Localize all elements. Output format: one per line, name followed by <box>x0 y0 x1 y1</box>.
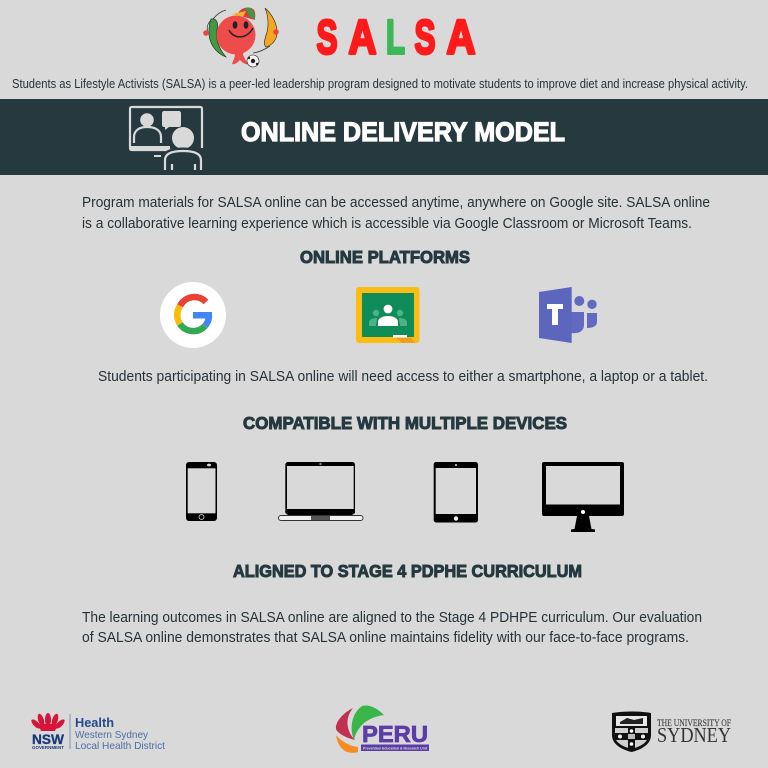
logo wordmark: SALSA: A <box>446 12 476 64</box>
text block: program materials: Program materials for SALSA online can be accessed anytime, anywhere on Google site. SALSA online <box>82 195 710 211</box>
icon: SALSA mascot <box>203 7 279 67</box>
text block: program materials <box>82 195 710 232</box>
icon: online video meeting <box>130 107 202 170</box>
heading: curriculum: ALIGNED TO STAGE 4 PDPHE CURRICULUM <box>233 561 582 581</box>
text block: learning outcomes <box>82 610 702 646</box>
logo: University of Sydney <box>612 712 731 752</box>
icon: desktop monitor <box>542 462 624 532</box>
icon: Google <box>160 282 226 348</box>
icon: laptop <box>278 462 363 520</box>
logo wordmark: SALSA: S <box>316 12 338 64</box>
text block: learning outcomes: The learning outcomes in SALSA online are aligned to the Stage 4 PDHPE curriculum. Our evaluation <box>82 610 702 626</box>
logo: NSW Health: Local Health District <box>75 740 165 752</box>
logo: NSW Health: GOVERNMENT <box>32 745 64 750</box>
logo: NSW Health: Western Sydney <box>75 729 149 741</box>
heading: online platforms: ONLINE PLATFORMS <box>300 247 470 267</box>
text block: learning outcomes: of SALSA online demonstrates that SALSA online maintains fidelity with our face-to-face programs. <box>82 630 689 646</box>
logo: NSW Health: Health <box>75 715 114 730</box>
icon: smartphone <box>186 462 217 521</box>
logo wordmark: SALSA: A <box>348 12 376 64</box>
logo: NSW Health <box>30 713 165 752</box>
logo wordmark: SALSA: L <box>386 12 405 64</box>
banner title: ONLINE DELIVERY MODEL <box>241 117 565 147</box>
logo: PERU: Prevention Education & Research Unit <box>363 746 428 750</box>
icon: Microsoft Teams <box>539 287 597 343</box>
icon: Google Classroom <box>356 287 420 343</box>
logo wordmark: SALSA: S <box>414 12 436 64</box>
header banner <box>0 99 768 175</box>
text block: program materials: is a collaborative learning experience which is accessible via Google Classroom or Microsoft Teams. <box>82 216 692 232</box>
icon: tablet <box>434 462 478 522</box>
logo: University of Sydney: THE UNIVERSITY OF <box>657 718 731 728</box>
heading: compatible devices: COMPATIBLE WITH MULTIPLE DEVICES <box>243 413 567 433</box>
text: device requirement: Students participating in SALSA online will need access to either a smartphone, a laptop or a tablet. <box>98 369 708 385</box>
logo: PERU: PERU <box>362 721 428 747</box>
logo: University of Sydney: SYDNEY <box>657 723 731 747</box>
logo: NSW Health: NSW <box>32 731 65 747</box>
logo wordmark: SALSA <box>316 12 476 64</box>
logo: PERU <box>336 706 429 753</box>
